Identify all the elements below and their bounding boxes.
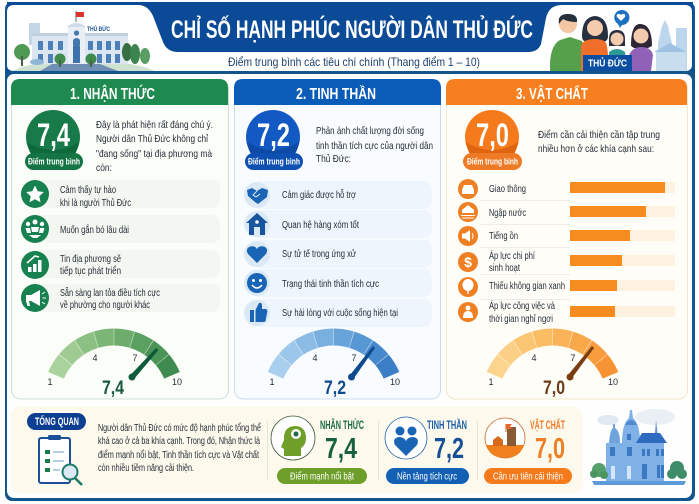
score badge 7,0: [463, 110, 522, 170]
score badge 7,2: Điểm trung bình: [248, 156, 300, 168]
overview text: khá cao ở cả ba khía cạnh. Trong đó, Nhận thức là: [98, 435, 260, 447]
description: nhiều hơn ở các khía cạnh sau:: [538, 143, 654, 155]
icon: buildings: [485, 418, 525, 458]
gauge: vat chat: 4: [531, 353, 537, 363]
item: tin dia phuong: Tin địa phương sẽ: [60, 254, 121, 265]
item: tu te: [244, 240, 432, 268]
bar row: tieng on: Tiếng ồn: [489, 230, 518, 242]
description: Điểm cần cải thiện cần tập trung: [538, 129, 660, 141]
gauge: tinh than: 1: [269, 377, 275, 387]
description: [538, 129, 660, 155]
gauge: tinh than: [269, 337, 400, 399]
card: tinh than: [385, 417, 469, 484]
tong quan label: [27, 413, 86, 430]
item: hai long: [244, 299, 432, 327]
score badge 7,0: 7,0: [476, 117, 509, 153]
gauge: nhan thuc: 7: [132, 353, 138, 363]
item: tin dia phuong: [21, 250, 220, 279]
row separators: [480, 200, 570, 300]
description: "đang sống" tại địa phương mà: [96, 148, 212, 160]
tong quan label: TỔNG QUAN: [35, 415, 79, 428]
header: vat chat: [446, 79, 687, 105]
description: Thủ Đức:: [316, 153, 351, 165]
item: tu hao: [21, 180, 220, 209]
bar row: giao thong: Giao thông: [489, 184, 526, 195]
bar row: chi phi: Áp lực chi phí: [489, 249, 535, 262]
subtitle: Điểm trung bình các tiêu chí chính (Thang điểm 1 – 10): [228, 55, 480, 69]
label on building: THỦ ĐỨC: [87, 24, 110, 33]
header: tinh than: [234, 79, 441, 105]
item: ho tro: [244, 181, 432, 209]
gauge: tinh than: 7: [351, 353, 357, 363]
score badge 7,4: [25, 110, 83, 170]
speech bubble with heart: [614, 10, 629, 28]
item: tu te: Sự tử tế trong ứng xử: [282, 248, 356, 260]
bar row: khong gian xanh: [458, 277, 675, 297]
panel: tong quan: [11, 407, 583, 493]
illustration: family: [550, 10, 687, 71]
bar row: ngap nuoc: Ngập nước: [489, 208, 526, 219]
score badge 7,2: [245, 110, 303, 170]
pill: Nền tảng tích cực: [397, 470, 457, 482]
card: tinh than: 7,2: [434, 433, 464, 465]
gauge: nhan thuc: 10: [172, 377, 182, 387]
overview text: Người dân Thủ Đức có mức độ hạnh phúc tổng thể: [98, 422, 261, 434]
overview text: còn nhiều tiềm năng cải thiện.: [98, 462, 194, 474]
bar row: giao thong: [458, 179, 675, 199]
gauge: tinh than: 7,2: [324, 378, 346, 399]
man: [550, 37, 586, 71]
header left white panel: [7, 5, 692, 71]
bar row: tieng on: [458, 226, 675, 246]
description: Phản ánh chất lượng đời sống: [316, 125, 424, 137]
score badge 7,0: Điểm trung bình: [467, 156, 518, 168]
child: [609, 30, 625, 46]
card: nhan thuc: 7,4: [325, 433, 357, 465]
item: tich cuc: [244, 269, 432, 297]
bar row: khong gian xanh: Thiếu không gian xanh: [489, 280, 565, 292]
gauge: vat chat: 7,0: [543, 378, 565, 399]
item: lan toa: về phường cho người khác: [60, 299, 150, 311]
bar row: ap luc cong viec: Áp lực công việc và: [489, 299, 555, 312]
description: [96, 119, 213, 174]
gauge: vat chat: 1: [488, 377, 494, 387]
gauge: vat chat: [488, 337, 618, 399]
gauge: nhan thuc: 7,4: [102, 378, 124, 399]
item: tin dia phuong: tiếp tục phát triển: [60, 265, 121, 277]
card: vat chat: VẬT CHẤT: [530, 419, 565, 432]
overview text: [98, 422, 261, 474]
pill: Điểm mạnh nổi bật: [290, 470, 354, 482]
girl: [631, 24, 652, 48]
panel: vat chat: [446, 79, 688, 399]
bar row: chi phi: $: [464, 254, 472, 270]
icon: clipboard with magnifier: [39, 435, 82, 485]
gauge: nhan thuc: 4: [92, 353, 98, 363]
description: Người dân Thủ Đức không chỉ: [96, 133, 209, 145]
card: tinh than: TINH THẦN: [427, 419, 467, 432]
item: lan toa: Sẵn sàng lan tỏa điều tích cực: [60, 286, 160, 299]
gauge: vat chat: 7: [570, 353, 576, 363]
header band: [7, 2, 693, 72]
panel: nhan thuc: [11, 79, 228, 399]
woman: [582, 16, 608, 42]
score badge 7,4: Điểm trung bình: [28, 156, 80, 168]
header: vat chat: 3. VẬT CHẤT: [516, 84, 588, 103]
bar row: ap luc cong viec: thời gian nghỉ ngơi: [489, 313, 553, 325]
description: [316, 125, 433, 165]
item: tu hao: khi là người Thủ Đức: [60, 197, 131, 209]
card: nhan thuc: [271, 416, 367, 484]
item: tich cuc: Trạng thái tinh thần tích cực: [282, 278, 379, 290]
item: hai long: Sự hài lòng với cuộc sống hiện tại: [282, 307, 398, 319]
gauge: vat chat: 10: [608, 377, 618, 387]
bar row: ngap nuoc: [458, 202, 675, 222]
item: tu hao: Cảm thấy tự hào: [60, 184, 116, 196]
panel: tinh than: [234, 79, 441, 399]
description: Đây là phát hiện rất đáng chú ý.: [96, 119, 213, 131]
badge Thu Duc: THỦ ĐỨC: [588, 56, 627, 70]
gauge: nhan thuc: [47, 337, 182, 399]
pill: Cần ưu tiên cải thiện: [493, 470, 563, 482]
description: còn:: [96, 162, 112, 174]
header: nhan thuc: 1. NHẬN THỨC: [70, 84, 155, 103]
score badge 7,4: 7,4: [37, 117, 70, 153]
overview text: điểm mạnh nổi bật, Tinh thần tích cực và Vật chất: [98, 449, 259, 461]
gauge: tinh than: 10: [390, 377, 400, 387]
gauge: nhan thuc: 1: [47, 377, 53, 387]
illustration: Thu Duc city hall: [12, 11, 155, 71]
bar row: ap luc cong viec: [458, 299, 675, 325]
header: tinh than: 2. TINH THẦN: [296, 84, 376, 103]
item: gan bo: Muốn gắn bó lâu dài: [60, 223, 129, 236]
score badge 7,2: 7,2: [257, 117, 290, 153]
item: ho tro: Cảm giác được hỗ trợ: [282, 188, 356, 201]
card: vat chat: [484, 418, 572, 484]
icon: people heart: [385, 417, 427, 459]
icon: head: [271, 416, 315, 460]
card: vat chat: 7,0: [535, 433, 565, 465]
description: tinh thần tích cực của người dân: [316, 140, 433, 152]
gauge: tinh than: 4: [312, 353, 318, 363]
item: lan toa: [21, 284, 220, 312]
item: hang xom: [244, 210, 432, 238]
item: hang xom: Quan hệ hàng xóm tốt: [282, 219, 359, 231]
divider band under header: [5, 71, 695, 74]
illustration: church: [590, 409, 687, 485]
item: gan bo: [21, 215, 220, 243]
header: nhan thuc: [11, 79, 228, 105]
title: CHỈ SỐ HẠNH PHÚC NGƯỜI DÂN THỦ ĐỨC: [171, 14, 533, 44]
card: nhan thuc: NHẬN THỨC: [320, 419, 364, 432]
bar row: chi phi: sinh hoạt: [489, 263, 520, 274]
bar row: chi phi: [458, 249, 675, 274]
